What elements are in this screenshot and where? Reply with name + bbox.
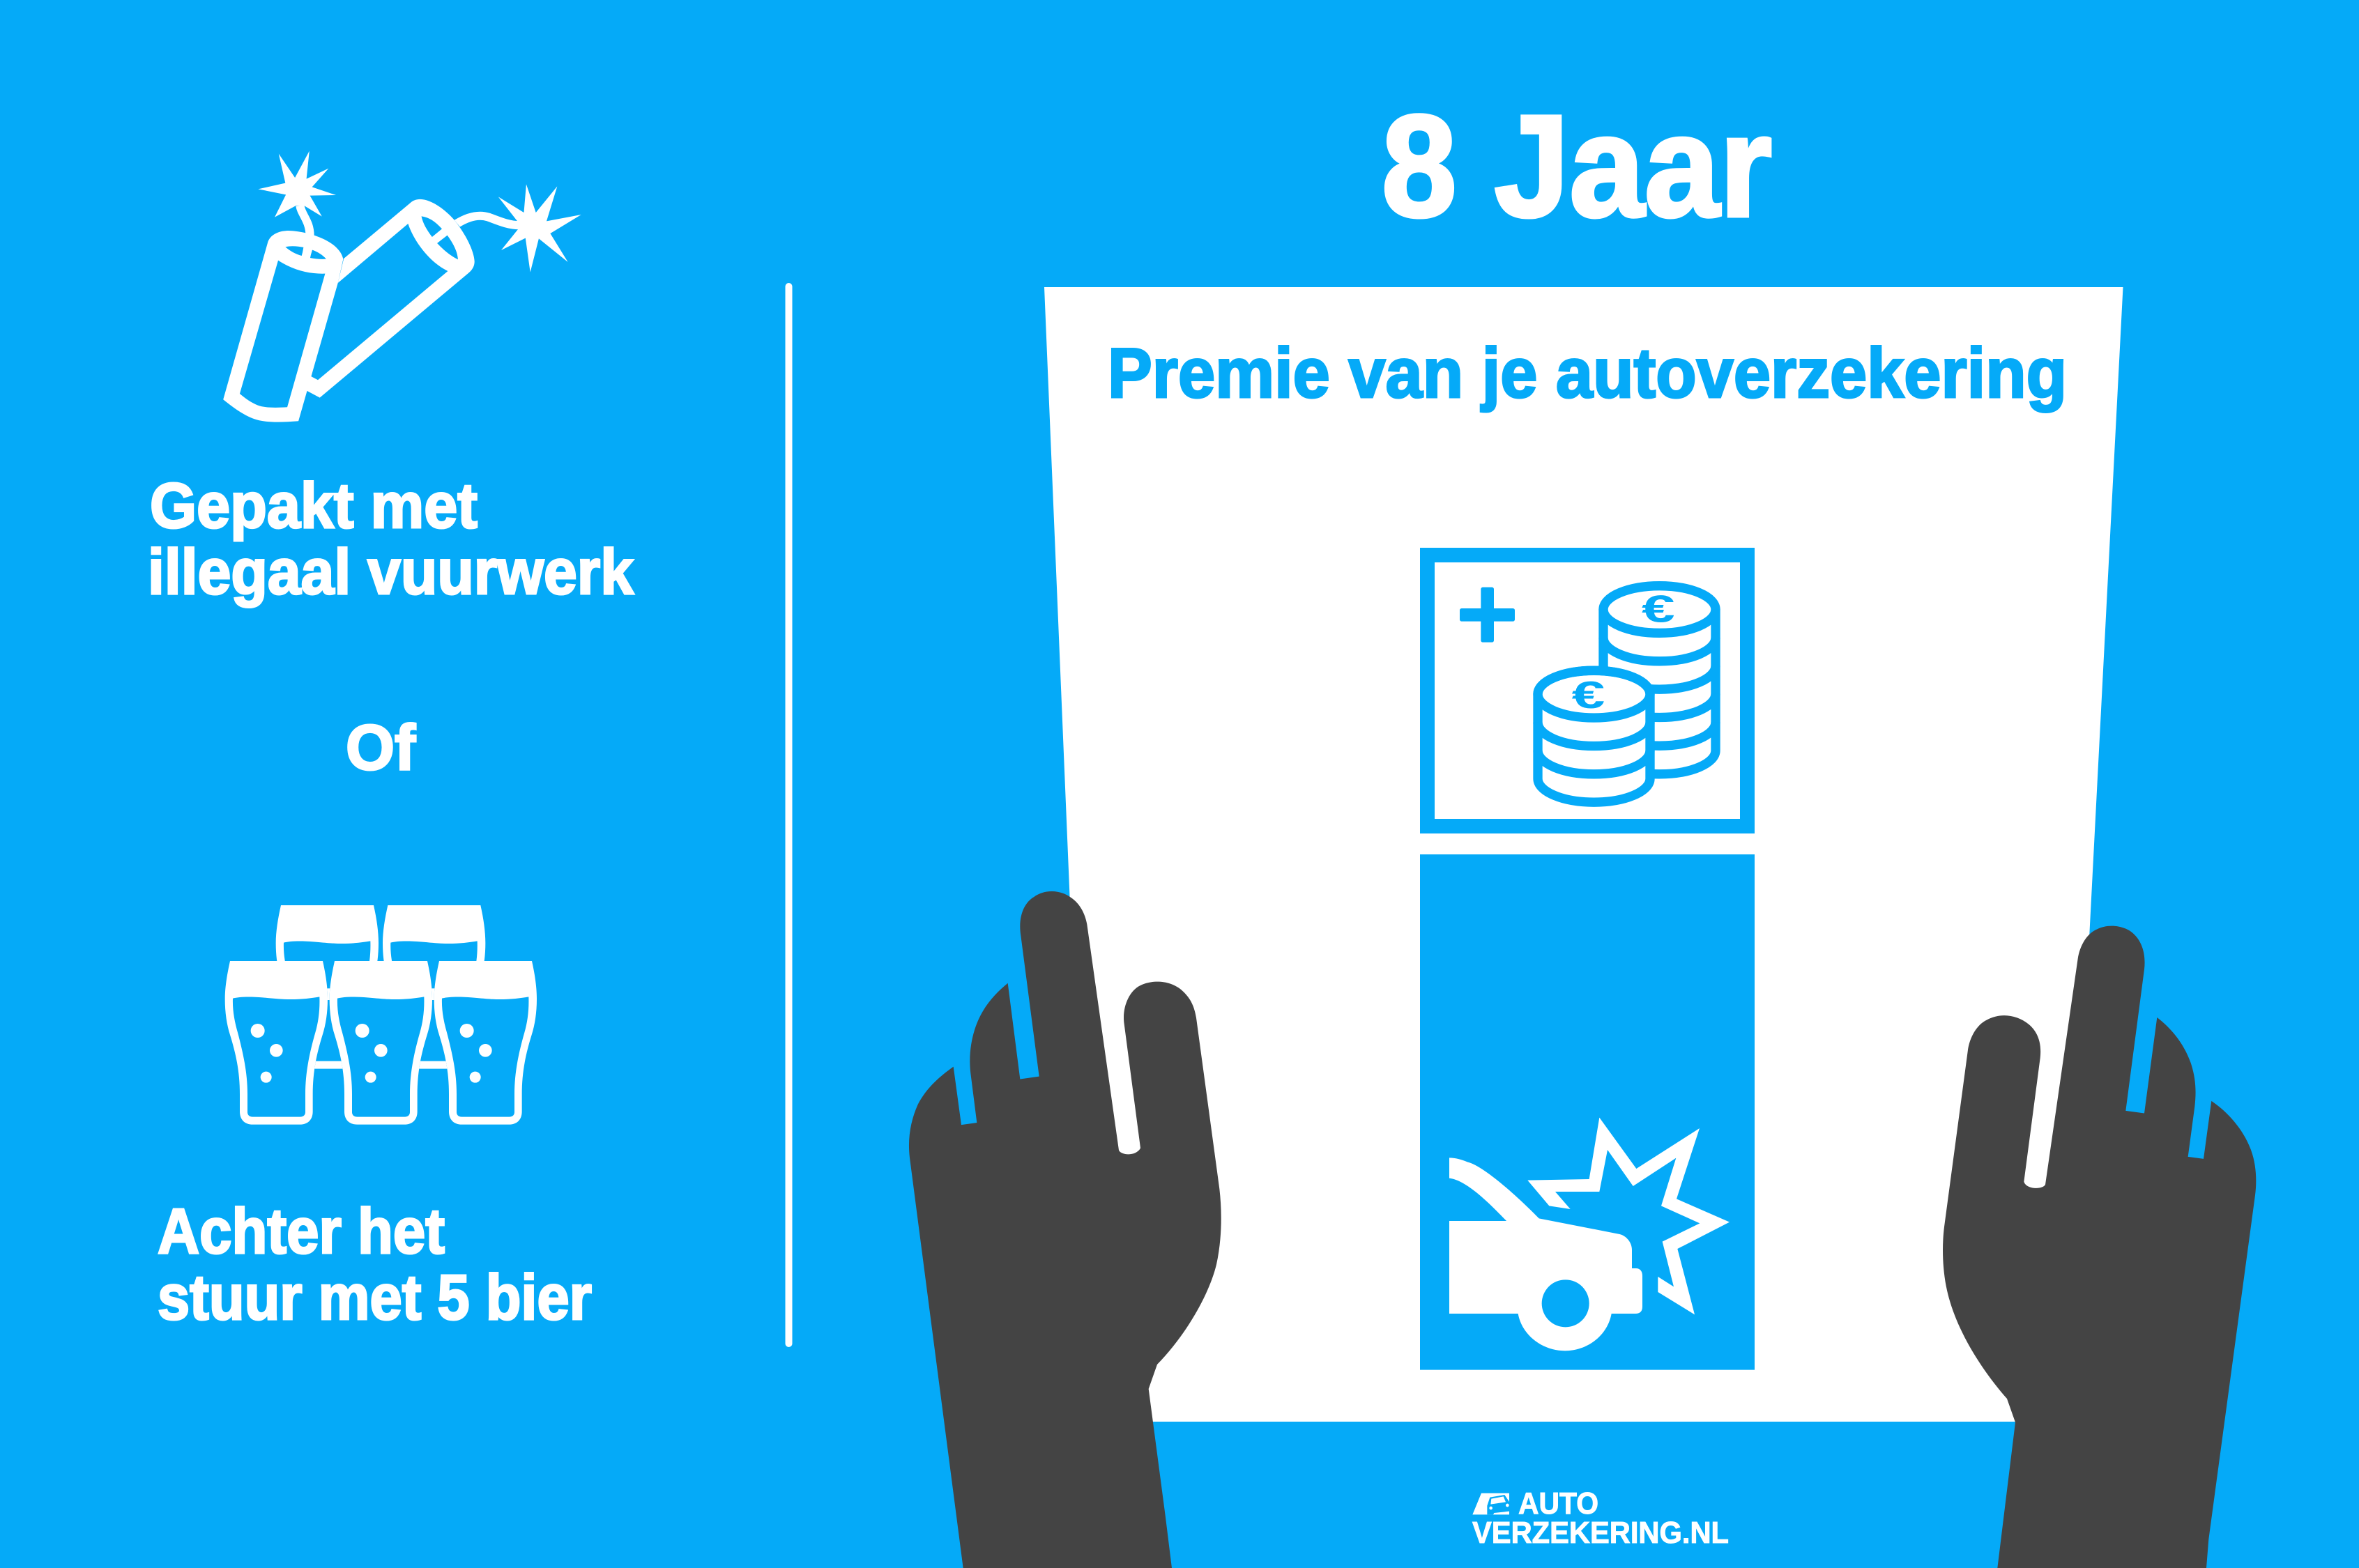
logo car mark <box>1472 1493 1509 1514</box>
icon: crashed car <box>1449 1158 1642 1351</box>
text: achter het stuur met 5 bier: stuur met 5 bier <box>158 1262 592 1333</box>
icon: right hand <box>1943 926 2256 1568</box>
text: gepakt met illegaal vuurwerk: Gepakt met <box>150 470 478 541</box>
frame <box>1427 555 1747 826</box>
logo wordmark: AUTO <box>1518 1486 1598 1521</box>
icon: plus <box>1460 587 1515 643</box>
icon: left hand <box>909 891 1221 1568</box>
text: achter het stuur met 5 bier <box>158 1196 592 1333</box>
icon: collision burst <box>1527 1118 1730 1314</box>
divider line <box>785 286 792 1344</box>
text: gepakt met illegaal vuurwerk <box>148 470 634 608</box>
text: of: Of <box>346 712 415 783</box>
panel: insurance document <box>1044 287 2123 1422</box>
icon: rear coin stack <box>1603 586 1716 774</box>
panel: extra premium coins <box>1427 555 1747 826</box>
heading: premie van je autoverzekering: Premie van je autoverzekering <box>1108 335 2067 413</box>
icon: firecrackers <box>223 151 581 422</box>
euro sign rear: € <box>1642 587 1675 631</box>
panel: car crash <box>1420 854 1755 1370</box>
paper sheet <box>1044 287 2123 1422</box>
text: achter het stuur met 5 bier: Achter het <box>158 1196 445 1267</box>
icon: five beers <box>225 905 537 1125</box>
logo: autoverzekering.nl <box>1472 1486 1729 1550</box>
blue tile <box>1420 854 1755 1370</box>
text: gepakt met illegaal vuurwerk: illegaal vuurwerk <box>148 537 634 608</box>
euro sign front: € <box>1572 673 1605 716</box>
logo: autoverzekering.nl: VERZEKERING.NL <box>1472 1516 1729 1550</box>
icon: front coin stack <box>1538 670 1650 802</box>
title: 8 jaar: 8 Jaar <box>1382 86 1772 247</box>
